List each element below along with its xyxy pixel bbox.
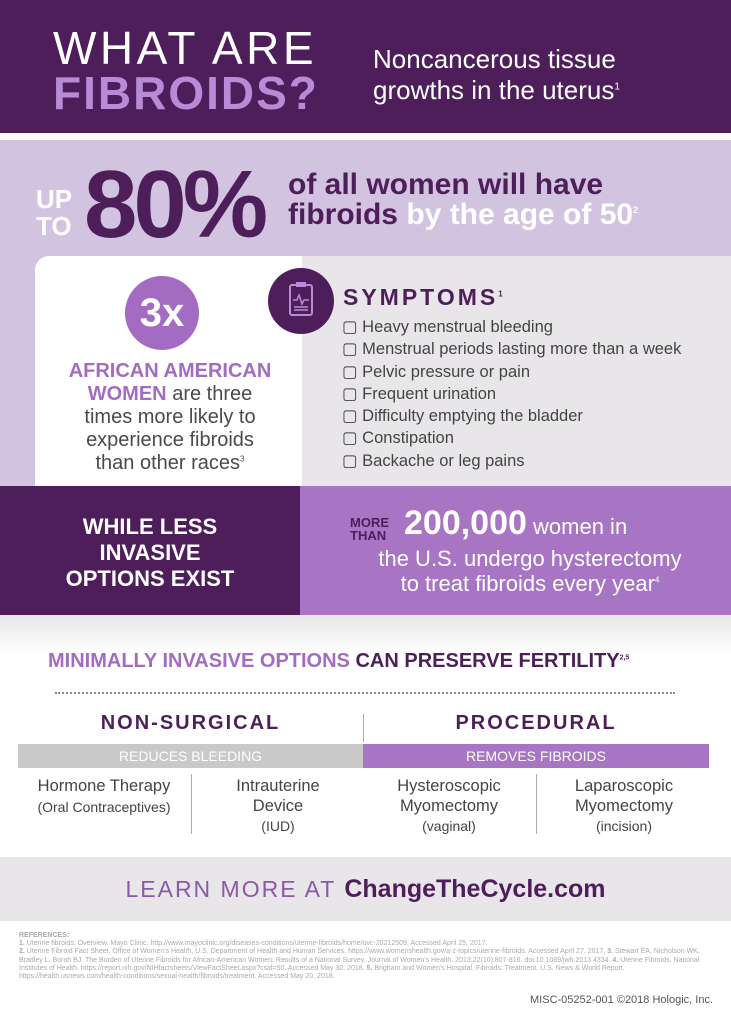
non-surgical column	[18, 712, 363, 834]
procedural column: (incision)	[596, 818, 652, 834]
up to 80%: 80%	[84, 151, 264, 258]
procedural column: Myomectomy	[400, 797, 498, 815]
panel: less invasive: WHILE LESS	[83, 514, 217, 539]
symptoms list: ▢ Heavy menstrual bleeding	[342, 318, 553, 336]
african american text: than other races3	[96, 452, 244, 474]
panel: hysterectomy stat	[300, 486, 731, 615]
procedural column: Hysteroscopic	[397, 777, 501, 795]
references: 1. Uterine fibroids: Overview. Mayo Clinic. http://www.mayoclinic.org/diseases-conditions/uterine-fibroids/home/ovc-20212509. Accessed April 25, 2017.	[19, 940, 487, 947]
up to 80%: UP	[36, 184, 72, 214]
procedural column	[363, 712, 709, 834]
procedural column: REMOVES FIBROIDS	[466, 748, 606, 764]
panel: hysterectomy stat: the U.S. undergo hysterectomy	[378, 546, 682, 571]
up to 80%: TO	[36, 211, 72, 241]
panel: less invasive	[0, 486, 300, 615]
panel: hysterectomy stat: to treat fibroids every year4	[401, 571, 659, 596]
learn more banner	[0, 857, 731, 921]
title: FIBROIDS?	[53, 67, 319, 119]
symptoms list: ▢ Difficulty emptying the bladder	[342, 407, 583, 425]
copyright: MISC-05252-001 ©2018 Hologic, Inc.	[530, 994, 713, 1006]
panel: card	[35, 256, 731, 486]
procedural column: Laparoscopic	[575, 777, 673, 795]
symptoms heading: SYMPTOMS1	[343, 284, 503, 310]
symptoms list: ▢ Menstrual periods lasting more than a week	[342, 340, 681, 358]
subtitle: Noncancerous tissue	[373, 44, 616, 74]
symptoms list: ▢ Constipation	[342, 429, 454, 447]
african american text: experience fibroids	[86, 429, 254, 451]
non-surgical column: REDUCES BLEEDING	[119, 748, 262, 764]
heading: minimally invasive: MINIMALLY INVASIVE OPTIONS CAN PRESERVE FERTILITY2,5	[48, 650, 629, 672]
non-surgical column: NON-SURGICAL	[101, 712, 280, 734]
symptoms list	[342, 318, 682, 470]
african american text: times more likely to	[84, 406, 256, 428]
panel: statistic 80%	[0, 140, 731, 486]
non-surgical column: Hormone Therapy	[38, 777, 170, 795]
panel: hysterectomy stat: 200,000 women in	[404, 504, 627, 542]
procedural column: PROCEDURAL	[455, 712, 617, 734]
references: 2. Uterine Fibroid Fact Sheet. Office of Women's Health, U.S. Department of Health and Human Services. https://www.womenshealth.gov/a-z-topics/uterine-fibroids. Accessed April 27, 2017. 3. Stewart EA, Nicholson WK, Bradley L, Borah BJ. The Burden of Uterine Fibroids for African-American Women: Results of a National Survey. Journal of Women's Health. 2013;22(10):807-816. doi:10.1089/jwh.2013.4334. 4. Uterine Fibroids. National Institutes of Health. https://report.nih.gov/NIHfactsheets/ViewFactSheet.aspx?csid=50. Accessed May 30, 2018. 5. Brigham and Women's Hospital. Fibroids: Treatment. U.S. News & World Report. https://health.usnews.com/health-conditions/sexual-health/fibroids/treatment. Accessed May 20, 2018.	[19, 948, 700, 980]
learn more banner: LEARN MORE AT ChangeTheCycle.com	[125, 875, 606, 903]
stat text: fibroids by the age of 502	[288, 198, 638, 231]
subtitle	[373, 44, 620, 105]
african american text: WOMEN are three	[88, 383, 252, 405]
procedural column: Myomectomy	[575, 797, 673, 815]
header panel	[0, 0, 731, 133]
panel: less invasive: OPTIONS EXIST	[66, 566, 234, 591]
subtitle: growths in the uterus1	[373, 75, 620, 105]
panel: hysterectomy stat: THAN	[350, 528, 386, 543]
non-surgical column: (Oral Contraceptives)	[37, 799, 171, 815]
title: WHAT ARE	[53, 22, 317, 74]
symptoms list: ▢ Backache or leg pains	[342, 452, 525, 470]
symptoms list: ▢ Frequent urination	[342, 385, 496, 403]
references	[19, 932, 700, 980]
african american text: AFRICAN AMERICAN	[69, 360, 271, 382]
symptoms list: ▢ Pelvic pressure or pain	[342, 363, 530, 381]
symptoms background	[302, 256, 731, 486]
non-surgical column: (IUD)	[261, 818, 295, 834]
african american text	[69, 360, 271, 474]
gradient	[0, 615, 731, 655]
panel: less invasive: INVASIVE	[99, 540, 201, 565]
stat text: of all women will have	[288, 168, 603, 201]
panel: hysterectomy stat: MORE	[350, 515, 389, 530]
3x circle	[125, 276, 199, 350]
procedural column: (vaginal)	[422, 818, 476, 834]
3x circle: 3x	[140, 291, 184, 335]
title	[53, 22, 319, 119]
non-surgical column: Intrauterine	[236, 777, 320, 795]
icon: clipboard	[268, 268, 334, 334]
references: REFERENCES:	[19, 932, 69, 939]
non-surgical column: Device	[253, 797, 303, 815]
stat text	[288, 168, 638, 231]
